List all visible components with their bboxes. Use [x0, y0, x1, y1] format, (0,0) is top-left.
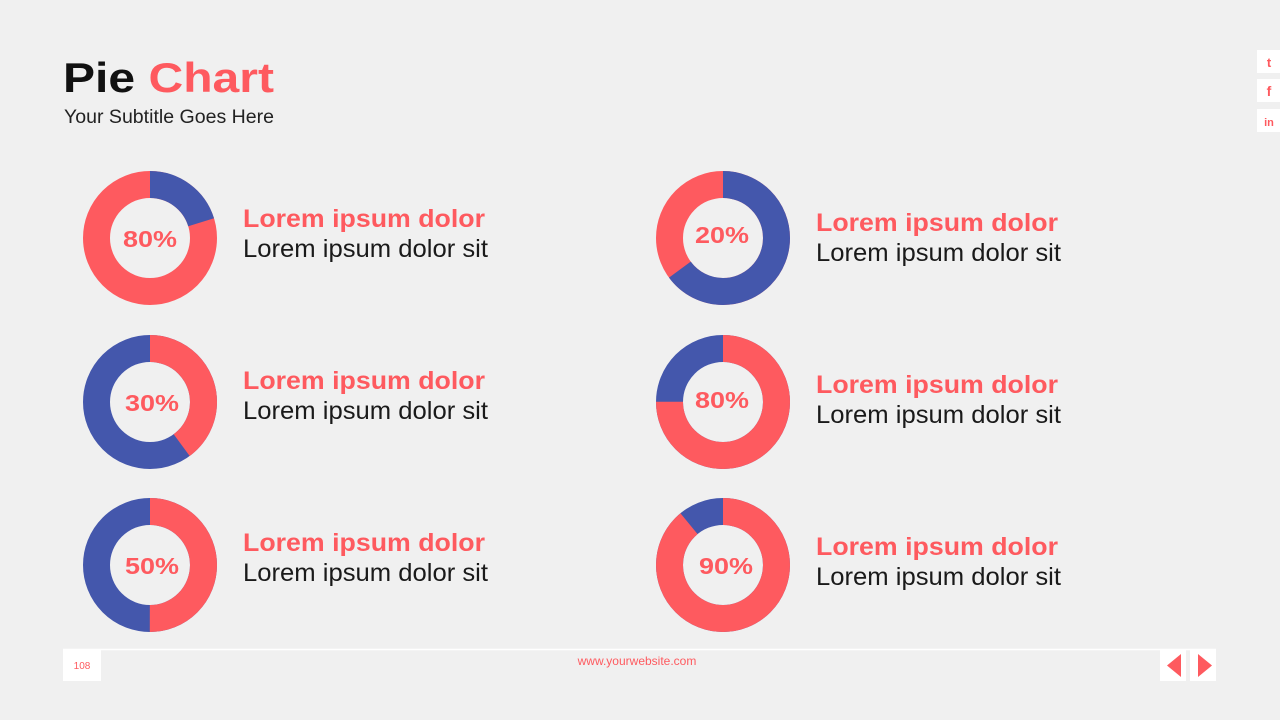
text 1	[243, 205, 488, 263]
donut 4	[670, 184, 776, 292]
text 3: Lorem ipsum dolor	[243, 529, 485, 557]
text 6: Lorem ipsum dolor sit	[816, 563, 1061, 591]
text 2: Lorem ipsum dolor sit	[243, 397, 488, 425]
text 6: Lorem ipsum dolor	[816, 533, 1058, 561]
text 4: Lorem ipsum dolor	[816, 209, 1058, 237]
donut 5: 80%	[695, 387, 749, 413]
arrow: next	[1190, 649, 1216, 681]
page number: 108	[74, 661, 91, 672]
text 2	[243, 367, 488, 425]
donut 5	[670, 348, 776, 456]
icon: twitter: t	[1267, 55, 1272, 70]
donut 3: 50%	[125, 553, 179, 579]
title: Pie Chart	[63, 54, 274, 101]
text 2: Lorem ipsum dolor	[243, 367, 485, 395]
donut 1: 80%	[123, 226, 177, 252]
icon: linkedin: in	[1264, 117, 1274, 129]
text 5	[816, 371, 1061, 429]
icon: facebook: f	[1267, 83, 1272, 99]
text 3	[243, 529, 488, 587]
text 4: Lorem ipsum dolor sit	[816, 239, 1061, 267]
text 5: Lorem ipsum dolor	[816, 371, 1058, 399]
donut 3	[96, 512, 204, 618]
donut 1	[96, 184, 204, 292]
donut 2	[96, 348, 204, 456]
text 4	[816, 209, 1061, 267]
text 1: Lorem ipsum dolor	[243, 205, 485, 233]
text 6	[816, 533, 1061, 591]
text 5: Lorem ipsum dolor sit	[816, 401, 1061, 429]
donut 4: 20%	[695, 222, 749, 248]
subtitle: Your Subtitle Goes Here	[64, 107, 274, 128]
website: www.yourwebsite.com	[577, 654, 696, 668]
text 3: Lorem ipsum dolor sit	[243, 559, 488, 587]
donut 6: 90%	[699, 553, 753, 579]
social icons	[1257, 50, 1280, 132]
arrow: previous	[1160, 649, 1186, 681]
donut 6	[670, 512, 776, 618]
text 1: Lorem ipsum dolor sit	[243, 235, 488, 263]
donut 2: 30%	[125, 390, 179, 416]
page number	[63, 649, 101, 681]
